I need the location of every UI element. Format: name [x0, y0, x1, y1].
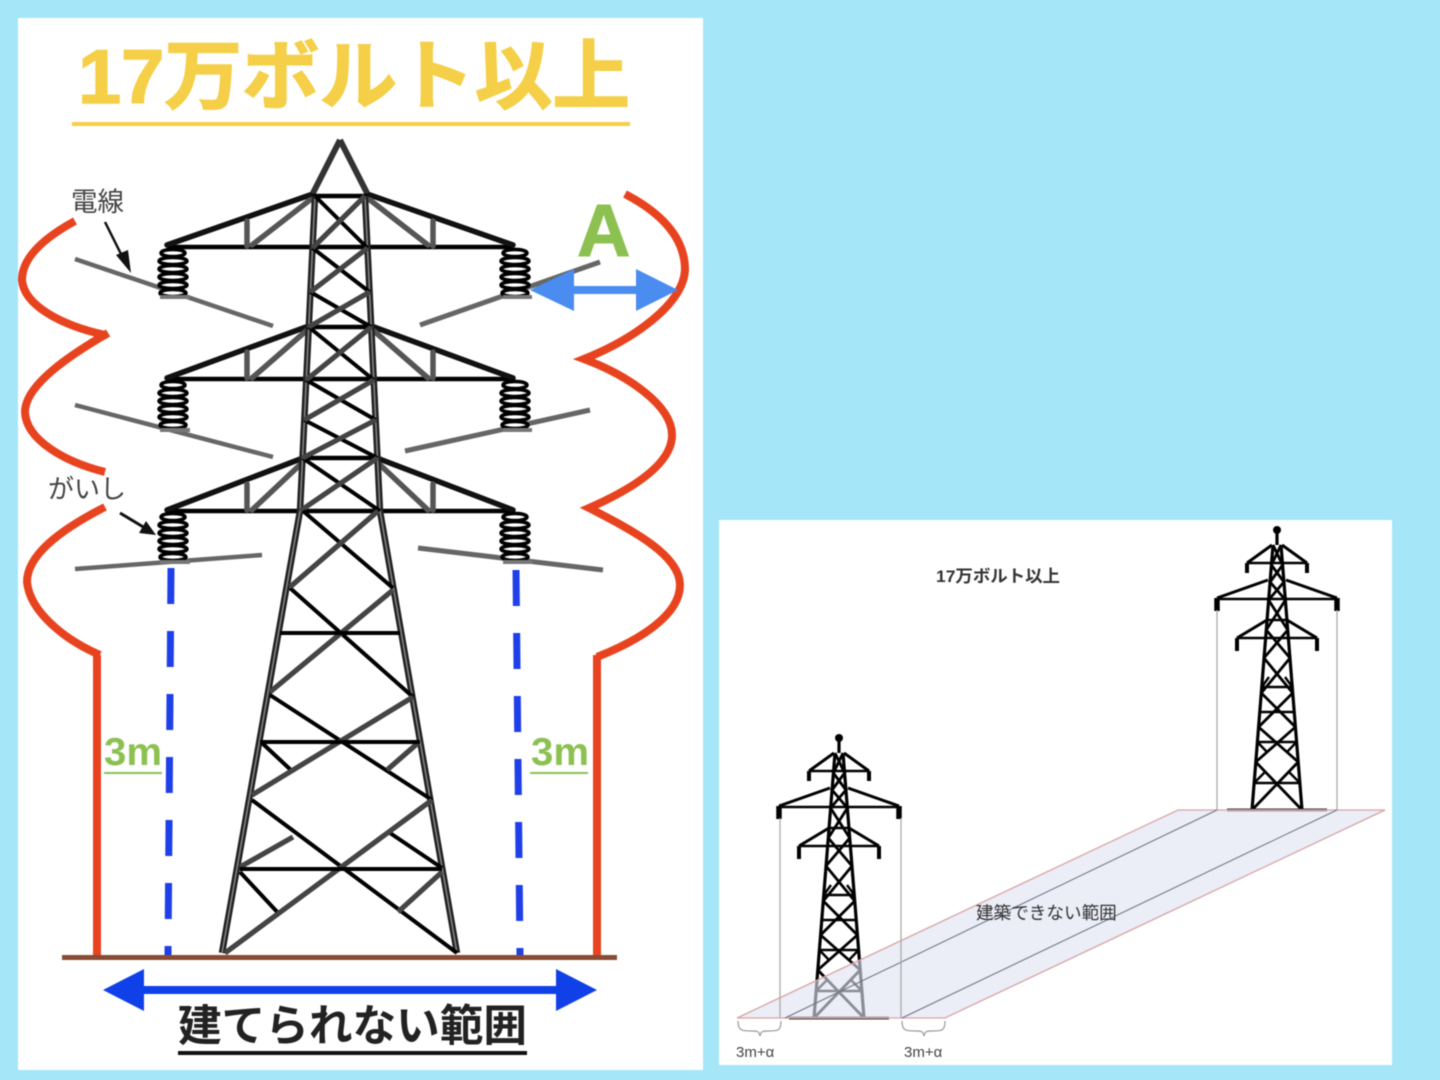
ground line — [62, 955, 617, 960]
wires: right side — [405, 262, 603, 570]
label: 3m left: 3m — [104, 731, 162, 774]
arrow: insulator pointer — [120, 513, 156, 535]
insulators — [159, 249, 532, 562]
panel: no-build corridor perspective — [719, 520, 1392, 1065]
arrow: distance A — [530, 269, 678, 311]
corridor: no-build area — [737, 810, 1385, 1018]
far tower — [1217, 526, 1337, 810]
near tower — [779, 734, 899, 1018]
label: がいし: がいし — [48, 474, 126, 504]
label: 3m+α left: 3m+α — [736, 1044, 775, 1061]
label: 3m right: 3m — [531, 731, 589, 774]
arrow: wire pointer — [105, 222, 131, 273]
brace: left — [738, 1021, 781, 1036]
wires: left side — [75, 259, 273, 569]
label: 電線: 電線 — [71, 187, 124, 217]
arrow: no-build span — [103, 969, 597, 1011]
brace: right — [902, 1021, 945, 1036]
red clearance boundary: left — [22, 221, 108, 957]
heading: 17万ボルト以上: 17万ボルト以上 — [936, 567, 1060, 586]
title: 17万ボルト以上: 17万ボルト以上 — [78, 35, 630, 120]
caption: 建てられない範囲: 建てられない範囲 — [178, 1003, 527, 1051]
blue dashed lines — [168, 568, 520, 955]
label: A: A — [577, 189, 630, 272]
red clearance boundary: right — [584, 194, 685, 957]
large transmission tower — [167, 140, 513, 953]
clearance guide lines — [780, 610, 1337, 1018]
label: 建築できない範囲: 建築できない範囲 — [976, 903, 1117, 923]
panel: high-voltage tower clearance diagram — [18, 18, 703, 1070]
label: 3m+α right: 3m+α — [904, 1044, 943, 1061]
